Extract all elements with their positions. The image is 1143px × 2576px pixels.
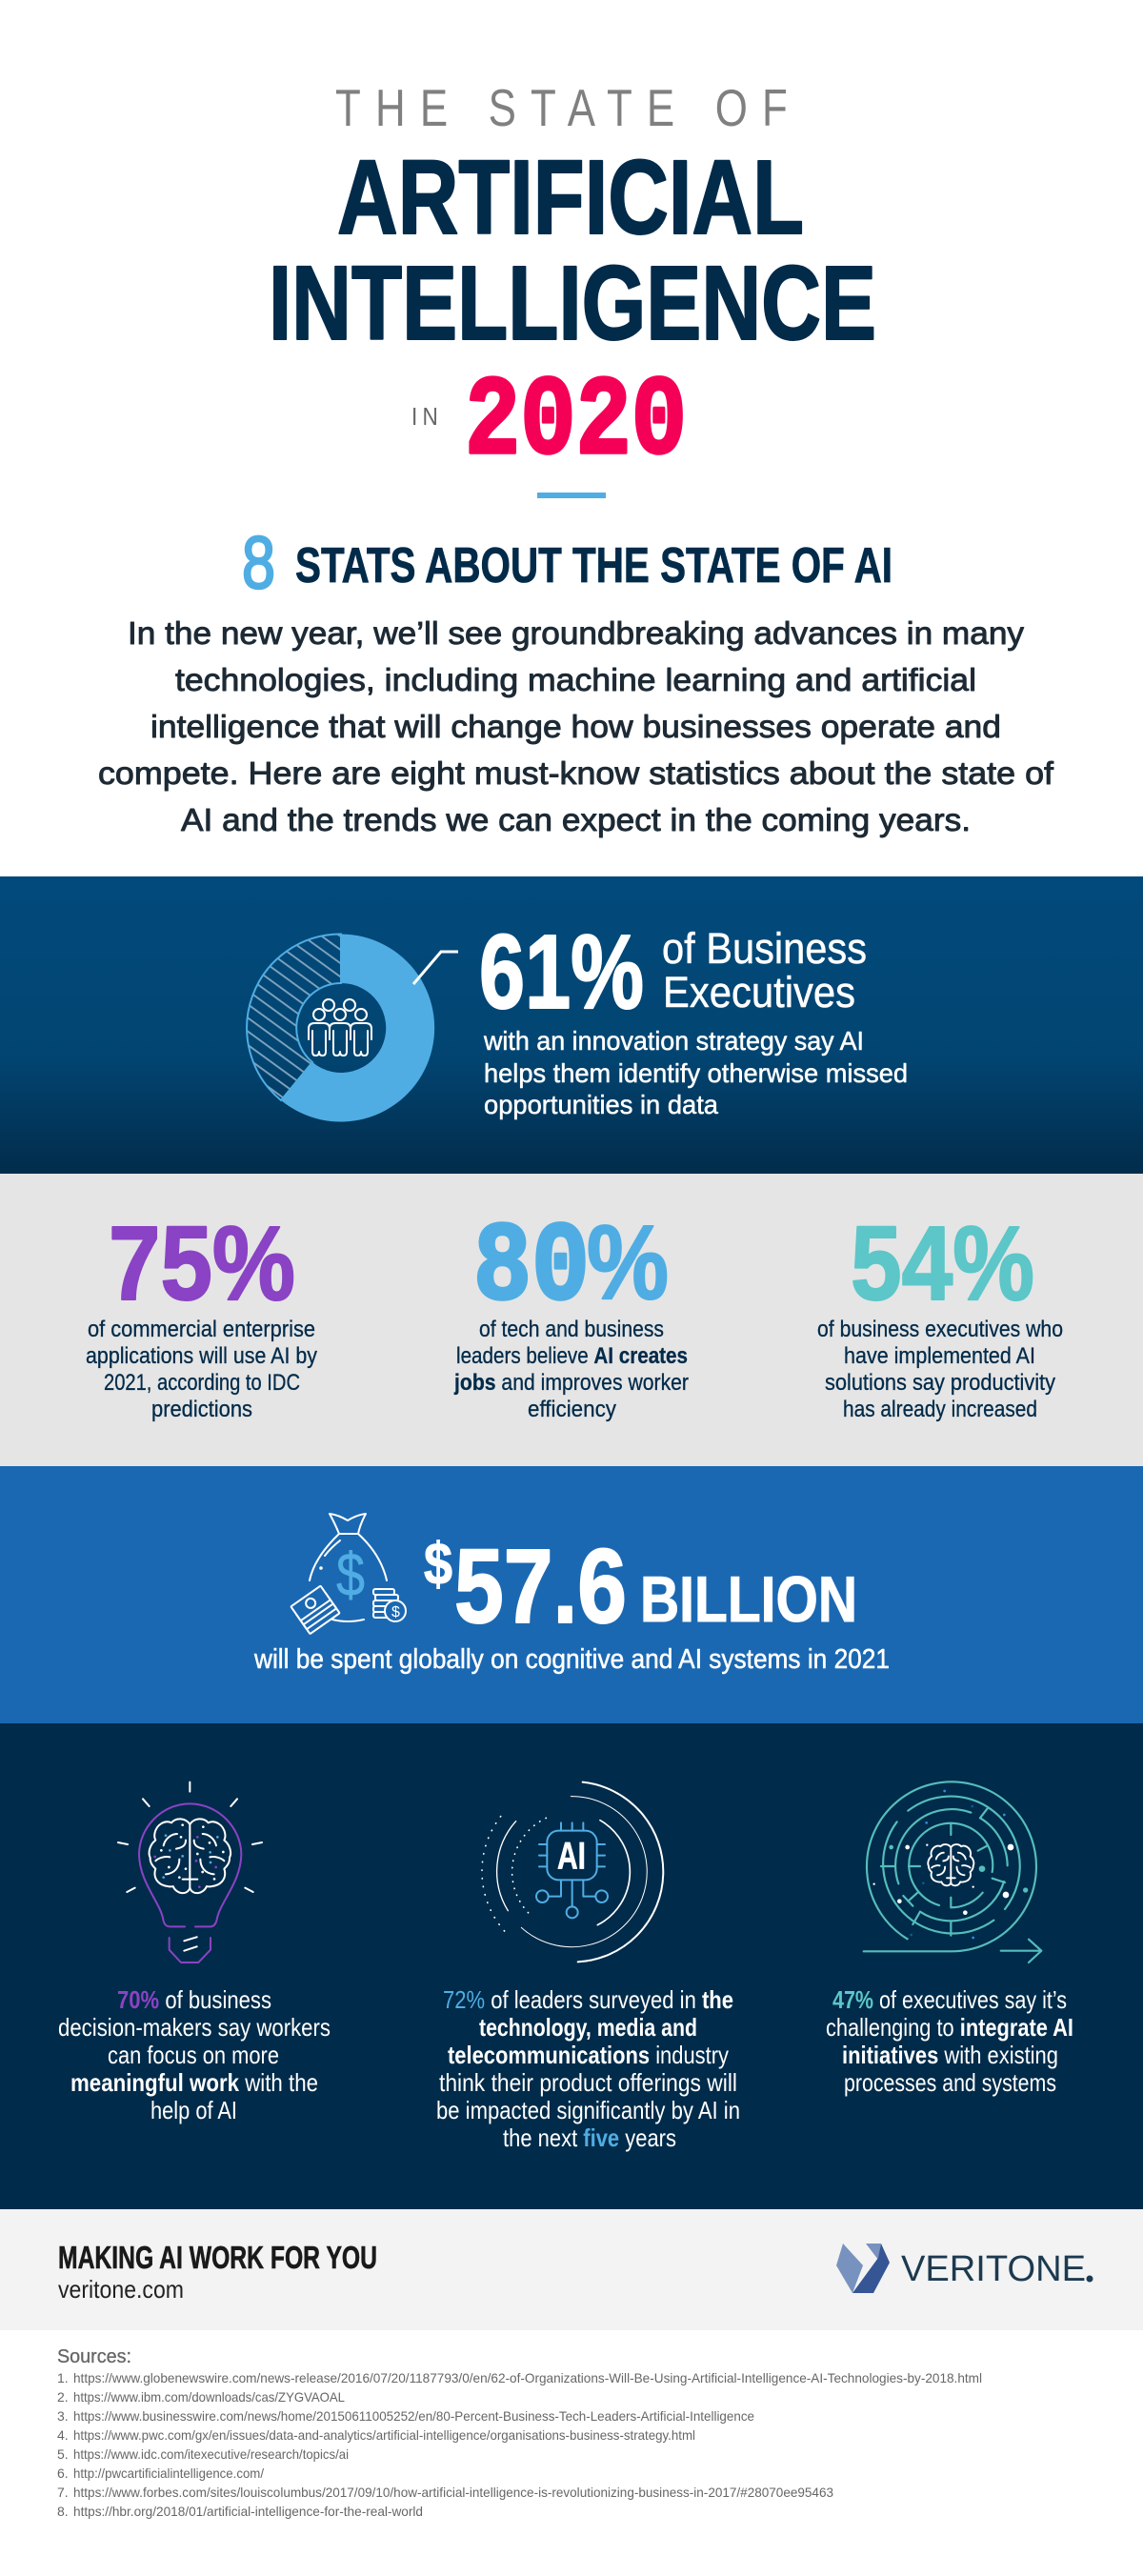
sources list: https://www.ibm.com/downloads/cas/ZYGVAOAL: [73, 2389, 345, 2405]
text: 72 percent: 72% of leaders surveyed in the: [443, 1985, 733, 2014]
icon: ai chip with arcs: AI: [557, 1836, 586, 1878]
intro paragraph: AI and the trends we can expect in the coming years.: [181, 802, 971, 837]
stat column: 80 percent: [453, 1204, 689, 1422]
text: 70 percent: [58, 1985, 331, 2124]
intro paragraph: compete. Here are eight must-know statistics about the state of: [98, 755, 1054, 791]
description: opportunities in data: [484, 1090, 718, 1119]
logo: veritone: VERITONE: [901, 2249, 1086, 2289]
accent rule: [537, 493, 606, 498]
text: 70 percent: help of AI: [150, 2096, 237, 2124]
website: veritone.com: [58, 2275, 184, 2304]
title block: [269, 78, 876, 487]
label: of business executives: of Business: [662, 924, 867, 973]
intro paragraph: technologies, including machine learning and artificial: [175, 662, 976, 697]
title: intelligence: INTELLIGENCE: [269, 245, 876, 362]
stat column: 75 percent: 75%: [109, 1205, 295, 1322]
sources list: https://www.businesswire.com/news/home/20150611005252/en/80-Percent-Business-Tech-Leaders-Artificial-Intelligence: [73, 2408, 754, 2424]
stat column: 54 percent: solutions say productivity: [825, 1370, 1055, 1396]
icon: light bulb with brain: [118, 1782, 262, 1962]
logo: veritone: [836, 2244, 1093, 2293]
stat column: 54 percent: [817, 1205, 1063, 1422]
sources list: https://www.forbes.com/sites/louiscolumbus/2017/09/10/how-artificial-intelligence-is-revolutionizing-business-in-2017/#28070ee95463: [73, 2485, 833, 2500]
text: 72 percent: telecommunications industry: [448, 2041, 729, 2069]
stat column: 75 percent: [86, 1205, 317, 1422]
sources list: http://pwcartificialintelligence.com/: [73, 2465, 264, 2481]
donut chart: 61 percent: [247, 934, 434, 1121]
sources list: 5.: [57, 2446, 69, 2462]
text: 47 percent: challenging to integrate AI: [826, 2013, 1073, 2042]
stat column: 75 percent: 2021, according to IDC: [104, 1370, 300, 1396]
text: 70 percent: decision-makers say workers: [58, 2013, 331, 2042]
intro paragraph: [98, 615, 1054, 837]
text: 72 percent: [436, 1985, 740, 2152]
text: 70 percent: 70% of business: [117, 1985, 271, 2014]
stat column: 75 percent: predictions: [151, 1397, 252, 1422]
description: [483, 1026, 908, 1119]
stat: 61 percent: 61%: [479, 914, 644, 1031]
icon: coins: $: [391, 1604, 400, 1620]
title: the state of: THE STATE OF: [335, 78, 802, 137]
text: 72 percent: technology, media and: [479, 2013, 697, 2042]
text: 72 percent: think their product offerings will: [439, 2068, 737, 2097]
title: 2020: 2020: [465, 360, 687, 487]
stat column: 80 percent: of tech and business: [479, 1317, 664, 1342]
sources list: 7.: [57, 2485, 69, 2500]
stat column: 80 percent: jobs and improves worker: [453, 1370, 689, 1396]
icon: group of people: [309, 999, 371, 1056]
heading: making ai work for you: MAKING AI WORK FOR YOU: [58, 2240, 377, 2275]
panel: footer call to action: [0, 2209, 1143, 2330]
description: will be spent globally on cognitive and AI systems in 2021: [253, 1644, 890, 1675]
sources list: 1.: [57, 2370, 69, 2385]
panel: 57.6 billion: [0, 1466, 1143, 1723]
sources list: https://hbr.org/2018/01/artificial-intelligence-for-the-real-world: [73, 2504, 423, 2519]
title: artificial: ARTIFICIAL: [337, 139, 804, 256]
sources list: 2.: [57, 2389, 69, 2405]
icon: maze with brain and arrow: [864, 1781, 1041, 1962]
stat: billion: BILLION: [640, 1563, 857, 1636]
label: of business executives: [662, 924, 867, 1016]
label: of business executives: Executives: [663, 968, 855, 1016]
description: helps them identify otherwise missed: [484, 1058, 908, 1088]
text: 47 percent: initiatives with existing: [842, 2041, 1058, 2069]
stat: 57.6: 57.6: [454, 1528, 627, 1645]
stat column: 54 percent: of business executives who: [817, 1317, 1063, 1342]
panel: 61 percent of business executives: [0, 876, 1143, 1174]
leader line: [413, 952, 458, 984]
panel: three stats: [0, 1174, 1143, 1466]
stat column: 54 percent: has already increased: [843, 1397, 1037, 1422]
stat column: 75 percent: of commercial enterprise: [88, 1317, 315, 1342]
icon: cash stack: [291, 1586, 340, 1634]
text: 70 percent: can focus on more: [108, 2041, 279, 2069]
sources list: https://www.idc.com/itexecutive/research/topics/ai: [73, 2446, 349, 2462]
intro paragraph: In the new year, we’ll see groundbreaking advances in many: [128, 615, 1025, 651]
description: with an innovation strategy say AI: [483, 1026, 864, 1056]
sources list: https://www.globenewswire.com/news-release/2016/07/20/1187793/0/en/62-of-Organizations-Will-Be-Using-Artificial-Intelligence-AI-Technologies-by-2018.html: [73, 2370, 982, 2385]
icon: money bag: [291, 1514, 406, 1634]
text: 72 percent: the next five years: [503, 2123, 676, 2152]
icon: ai chip with arcs: [482, 1782, 663, 1962]
stat column: 54 percent: have implemented AI: [844, 1343, 1035, 1369]
text: 47 percent: processes and systems: [844, 2068, 1056, 2097]
sources list: [57, 2346, 982, 2519]
stat: dollar sign: $: [424, 1532, 452, 1598]
stat column: 80 percent: efficiency: [528, 1397, 616, 1422]
subheading: [242, 520, 892, 604]
stats about the state of ai: STATS ABOUT THE STATE OF AI: [295, 538, 892, 594]
text: 72 percent: be impacted significantly by AI in: [436, 2096, 740, 2124]
sources list: 3.: [57, 2408, 69, 2424]
stat column: 80 percent: %: [587, 1204, 669, 1321]
stat column: 80 percent: 80: [473, 1206, 590, 1333]
intro paragraph: intelligence that will change how businesses operate and: [150, 709, 1001, 744]
stat column: 75 percent: applications will use AI by: [86, 1343, 317, 1369]
stat column: 54 percent: 54%: [851, 1205, 1034, 1322]
text: 70 percent: meaningful work with the: [70, 2068, 318, 2097]
panel: three insights: [0, 1723, 1143, 2209]
text: 47 percent: 47% of executives say it’s: [832, 1985, 1067, 2014]
big number 8: 8: [242, 520, 275, 604]
sources list: 8.: [57, 2504, 69, 2519]
text: 47 percent: [826, 1985, 1073, 2097]
title: in: IN: [411, 402, 443, 431]
icon: dollar sign: $: [336, 1540, 365, 1609]
stat column: 80 percent: leaders believe AI creates: [456, 1343, 688, 1369]
sources heading: Sources:: [57, 2346, 131, 2367]
sources list: 6.: [57, 2465, 69, 2481]
sources list: https://www.pwc.com/gx/en/issues/data-and-analytics/artificial-intelligence/organisations-business-strategy.html: [73, 2427, 695, 2443]
sources list: 4.: [57, 2427, 69, 2443]
